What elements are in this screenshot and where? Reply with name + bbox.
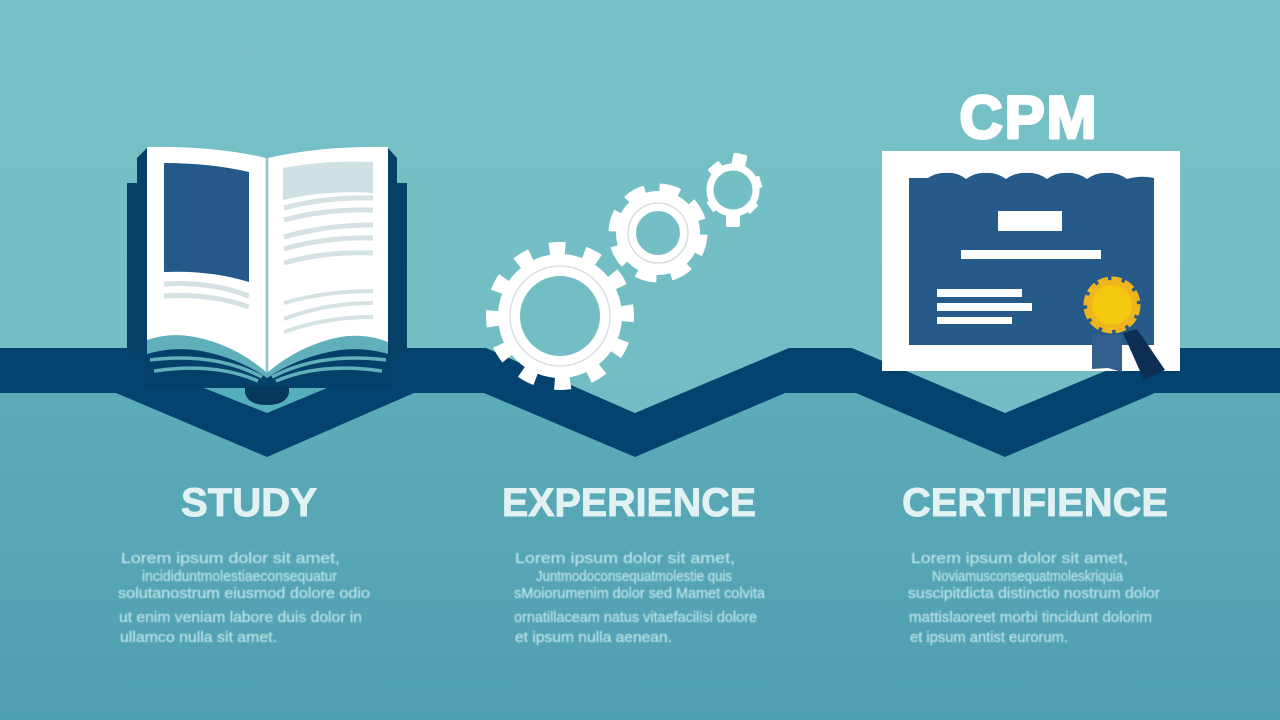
title: CPM: CPM bbox=[960, 84, 1096, 151]
step 3: CERTIFIENCE bbox=[902, 481, 1168, 646]
medium gear bbox=[604, 179, 712, 287]
certificate panel bbox=[909, 173, 1154, 345]
body text: experience: et ipsum nulla aenean. bbox=[515, 629, 672, 646]
heading: certifience: CERTIFIENCE bbox=[902, 481, 1168, 525]
lower background bbox=[0, 380, 1280, 720]
icon: open book bbox=[127, 147, 407, 413]
book spine line bbox=[266, 158, 268, 372]
certificate name line bbox=[961, 250, 1101, 259]
step 1: STUDY bbox=[118, 481, 370, 646]
body text: certifience: Lorem ipsum dolor sit amet, bbox=[911, 550, 1128, 567]
right page text lines bbox=[284, 198, 373, 332]
step 2: EXPERIENCE bbox=[502, 481, 766, 646]
icon: gears bbox=[491, 152, 762, 385]
body text: certifience: suscipitdicta distinctio nostrum dolor bbox=[908, 585, 1160, 602]
certificate heading block bbox=[998, 211, 1062, 231]
body text: certifience: et ipsum antist eurorum. bbox=[910, 629, 1068, 646]
book base bbox=[143, 335, 392, 387]
large gear bbox=[491, 247, 629, 385]
certificate frame bbox=[882, 151, 1180, 371]
body text: study: Lorem ipsum dolor sit amet, bbox=[121, 550, 340, 567]
page edges bbox=[147, 330, 388, 381]
body text: experience: sMoiorumenim dolor sed Mamet colvita bbox=[514, 585, 766, 602]
body text: study bbox=[118, 550, 370, 646]
left page picture bbox=[164, 163, 249, 282]
body text: experience bbox=[514, 550, 766, 646]
left page bbox=[147, 147, 266, 372]
body text: study: solutanostrum eiusmod dolore odio bbox=[118, 585, 370, 602]
body text: study: ullamco nulla sit amet. bbox=[120, 629, 277, 646]
right page heading block bbox=[283, 162, 373, 200]
body text: certifience: mattislaoreet morbi tincidunt dolorim bbox=[909, 609, 1152, 626]
book back cover left bbox=[127, 148, 147, 386]
body text: experience: Lorem ipsum dolor sit amet, bbox=[515, 550, 735, 567]
body text: experience: Juntmodoconsequatmolestie quis bbox=[536, 568, 732, 585]
ribbon right bbox=[1123, 329, 1165, 380]
upper background bbox=[0, 0, 1280, 413]
small gear bbox=[706, 152, 762, 227]
certificate detail lines bbox=[937, 289, 1032, 324]
zigzag path band bbox=[0, 348, 1280, 457]
body text: experience: ornatillaceam natus vitaefacilisi dolore bbox=[514, 609, 757, 626]
heading: study: STUDY bbox=[181, 481, 317, 525]
heading: experience: EXPERIENCE bbox=[502, 481, 756, 525]
right page bbox=[268, 147, 388, 372]
gold seal bbox=[1086, 278, 1138, 332]
body text: certifience: Noviamusconsequatmoleskriquia bbox=[932, 568, 1124, 585]
body text: study: incididuntmolestiaeconsequatur bbox=[142, 568, 337, 585]
icon: certificate bbox=[882, 151, 1180, 380]
body text: certifience bbox=[908, 550, 1160, 646]
left page text lines bbox=[164, 284, 249, 307]
notch under book bbox=[204, 388, 327, 413]
book back cover right bbox=[388, 148, 407, 386]
ribbon left bbox=[1092, 335, 1122, 372]
body text: study: ut enim veniam labore duis dolor in bbox=[119, 609, 362, 626]
book stand knob bbox=[245, 386, 289, 405]
